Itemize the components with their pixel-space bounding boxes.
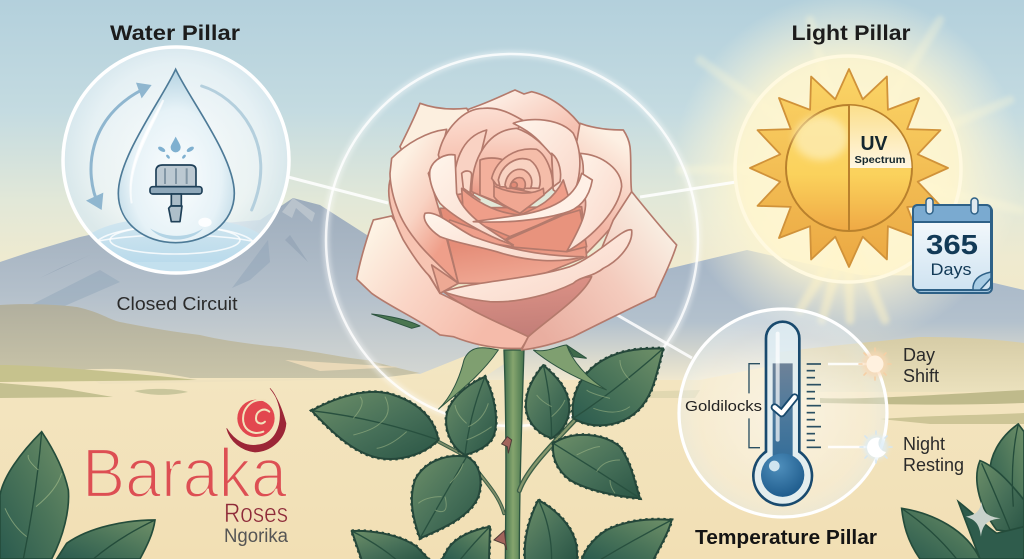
Roses wordmark: Roses <box>224 498 288 528</box>
temperature circle <box>679 309 887 517</box>
droplet icon with nozzle <box>86 69 261 243</box>
drip nozzle <box>150 165 202 222</box>
spray drops <box>157 137 195 159</box>
icon: sparkle <box>966 502 1001 537</box>
mid salmon folds <box>507 210 587 252</box>
scale ticks <box>807 364 821 447</box>
water circle outline <box>63 47 289 273</box>
Ngorika wordmark: Ngorika <box>224 526 288 547</box>
inner tall petals <box>513 120 580 202</box>
serrated leaves <box>312 348 672 559</box>
water circle <box>63 47 289 273</box>
connector lines from pillars to rose <box>288 177 736 358</box>
curled petal upper left <box>430 155 513 245</box>
night resting label: Night <box>903 434 945 454</box>
bottom cup <box>443 277 592 337</box>
back petals <box>467 90 592 180</box>
UV spectrum label: UV <box>860 133 888 155</box>
background: hills and plains <box>0 304 1024 424</box>
check mark <box>775 397 795 413</box>
branches <box>438 420 575 513</box>
left petals <box>389 180 458 293</box>
leaf veins <box>312 348 672 559</box>
plant: rose stem and foliage <box>312 345 672 559</box>
droplet <box>118 69 234 243</box>
calendar: 365 days: 365 <box>926 229 978 260</box>
rose bloom <box>357 90 677 350</box>
corner foliage bottom right <box>902 424 1024 559</box>
outer lower petals <box>357 216 528 348</box>
temperature pillar <box>679 309 964 549</box>
background: sun glow and rays <box>673 0 1023 343</box>
top centre petal <box>438 108 523 213</box>
calendar: 365 days: Days <box>930 260 972 279</box>
day shift label: Shift <box>903 366 939 386</box>
icon: night moon <box>860 431 892 463</box>
thermometer <box>749 322 821 505</box>
goldilocks label: Goldilocks <box>685 399 762 415</box>
circulation arrows <box>91 86 261 210</box>
range bracket <box>749 364 760 448</box>
stem <box>504 350 524 559</box>
water pillar heading: Water Pillar <box>110 22 240 45</box>
water pillar caption: Closed Circuit <box>116 294 238 314</box>
night resting label: Resting <box>903 455 964 475</box>
icon: day sun <box>859 348 891 380</box>
curled petal lower <box>443 230 632 302</box>
big ring around rose <box>326 54 698 426</box>
thorns <box>502 437 512 453</box>
Baraka wordmark: Baraka <box>82 434 287 512</box>
water pillar <box>63 22 289 314</box>
curled petal middle <box>424 213 583 261</box>
light pillar: Spectrum <box>854 154 906 166</box>
curled petal right <box>567 153 622 252</box>
inner cream band <box>473 173 592 222</box>
brand logo: Baraka Roses Ngorika <box>82 388 288 547</box>
corner foliage bottom left <box>0 432 155 559</box>
logo rose mark <box>227 388 286 452</box>
sun icon <box>750 69 948 267</box>
salmon cup <box>440 207 587 283</box>
sun and moon connector lines <box>828 364 868 447</box>
day shift label: Day <box>903 345 935 365</box>
sepal tip behind bloom <box>372 314 420 328</box>
ripples <box>92 222 253 271</box>
temperature pillar heading: Temperature Pillar <box>695 527 877 549</box>
calendar: 365 days <box>913 198 992 293</box>
light pillar heading: Light Pillar <box>792 22 910 45</box>
background: mountains <box>0 198 1024 380</box>
light pillar <box>735 22 992 293</box>
sun circle <box>735 56 961 282</box>
sepals <box>438 345 607 409</box>
